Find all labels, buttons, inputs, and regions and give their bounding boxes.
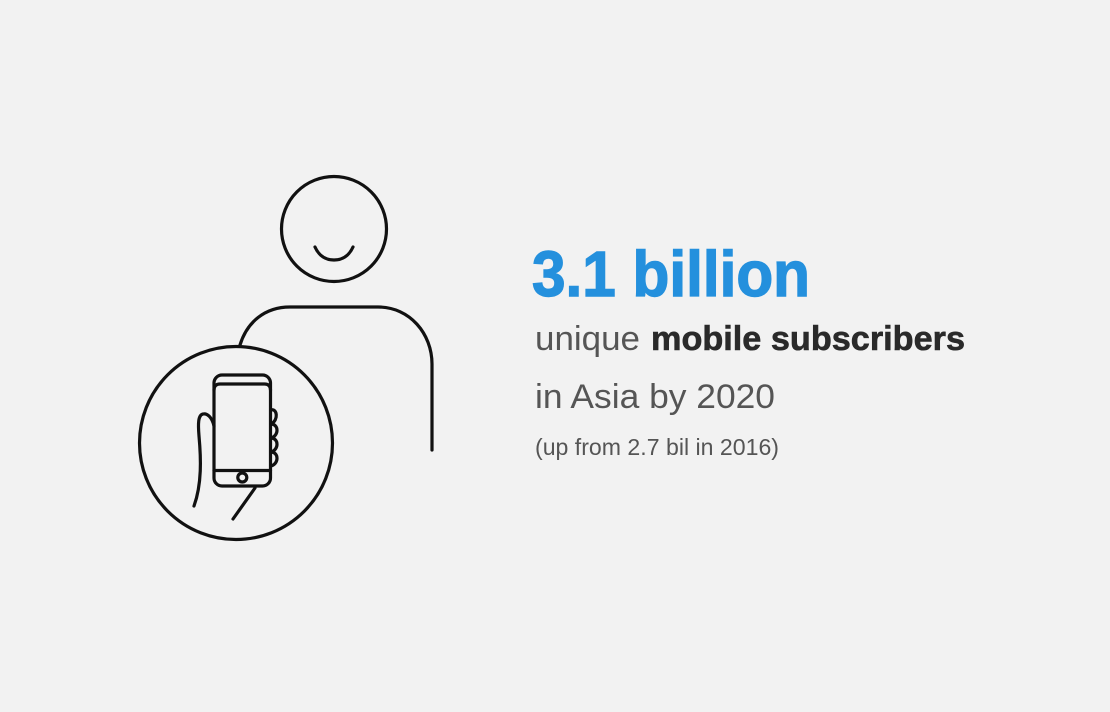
text: unique mobile subscribers: mobile subscribers [651,320,965,358]
text: unique mobile subscribers: unique [535,320,640,358]
icon: phone in hand circle [140,346,332,540]
heading: 3.1 billion: 3.1 billion [532,238,810,310]
text: in Asia by 2020: in Asia by 2020 [535,378,775,416]
text: up from 2.7 bil in 2016: (up from 2.7 bil in 2016) [535,434,779,460]
icon: person holding phone [140,176,432,540]
icon: body outline [240,307,432,450]
icon: head [282,176,386,282]
